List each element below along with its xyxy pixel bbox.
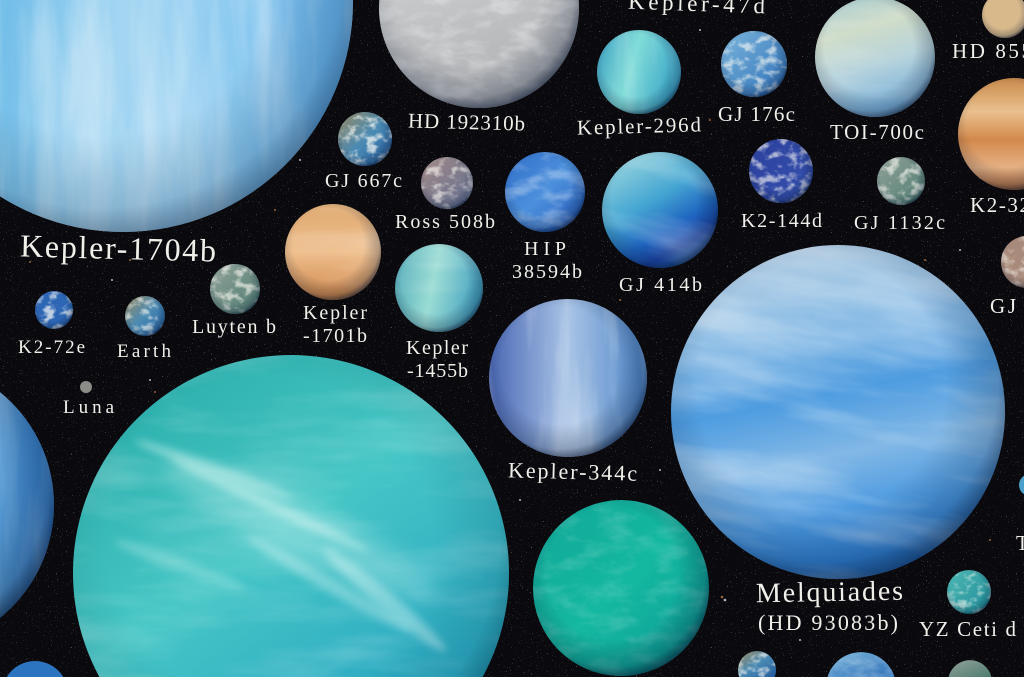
planet: K2-144d (749, 139, 813, 203)
planet: GJ 667c (338, 112, 392, 166)
label: HIP 38594b (512, 238, 582, 283)
label: Kepler-1701b: -1701b (303, 325, 367, 347)
planet: Ross 508b (421, 157, 473, 209)
label: Earth: Earth (117, 341, 172, 362)
planet: Luyten b (210, 264, 260, 314)
planet: GJ 1132c (877, 157, 925, 205)
planet: Kepler-1701b (285, 204, 381, 300)
label: Kepler-344c: Kepler-344c (508, 457, 638, 486)
planet: TOI-700c (815, 0, 935, 117)
planet: large teal (73, 355, 509, 677)
label: Kepler-1704b: Kepler-1704b (20, 227, 217, 269)
planet: Kepler-344c (489, 299, 647, 457)
planet: K2-72e (35, 291, 73, 329)
planet: Luna (80, 381, 92, 393)
planet: teal medium (533, 500, 709, 676)
planet: bottom blue (828, 652, 894, 677)
planet: K2-3 orange (958, 78, 1024, 190)
label: HD 192310b: HD 192310b (408, 108, 525, 136)
label: Kepler-1701b (303, 302, 367, 347)
label: Kepler-1455b: Kepler (406, 337, 468, 359)
planet: large blue top left (0, 0, 353, 232)
planet: left edge blue (0, 360, 54, 650)
label: Ross 508b: Ross 508b (395, 211, 495, 233)
planet: HD 192310b (379, 0, 579, 108)
planet: YZ Ceti d (947, 570, 991, 614)
label: GJ 176c: GJ 176c (718, 102, 795, 126)
label: HIP 38594b: HIP (524, 238, 566, 260)
label: GJ 1132c: GJ 1132c (854, 212, 945, 234)
planet: GJ 414b (589, 139, 731, 281)
planet: right edge small (1019, 474, 1024, 496)
label: Kepler-1701b: Kepler (303, 302, 367, 324)
label: K2-72e: K2-72e (18, 337, 85, 358)
planet: Kepler-1455b (395, 244, 483, 332)
planet: Melquiades (649, 223, 1024, 601)
label: HIP 38594b: 38594b (512, 261, 582, 283)
planet: bottom right green (949, 660, 991, 677)
label: GJ right edge: GJ (990, 294, 1016, 318)
label: Luyten b: Luyten b (192, 316, 276, 338)
planet: bottom small rocky (738, 651, 776, 677)
planet: top right small (982, 0, 1024, 38)
planet: Kepler-296d (597, 30, 681, 114)
label: Kepler-296d: Kepler-296d (577, 112, 702, 140)
label: Kepler-1455b: -1455b (407, 360, 468, 382)
planet: GJ 176c (721, 31, 787, 97)
label: TOI-700c: TOI-700c (830, 120, 924, 144)
label: Kepler-1455b (406, 337, 468, 382)
label: HD 93083b: (HD 93083b) (758, 610, 898, 635)
label: YZ Ceti d: YZ Ceti d (919, 617, 1016, 641)
planet: Earth (125, 296, 165, 336)
planet: HIP 38594b (505, 152, 585, 232)
label: GJ 414b: GJ 414b (619, 274, 702, 296)
planet: bottom left blue (7, 661, 63, 677)
label: K2-144d: K2-144d (741, 210, 822, 232)
label: GJ 667c: GJ 667c (325, 170, 402, 192)
label: Luna: Luna (63, 397, 115, 418)
label: Melquiades: Melquiades (756, 576, 903, 609)
planet: right edge GJ (1001, 236, 1024, 288)
